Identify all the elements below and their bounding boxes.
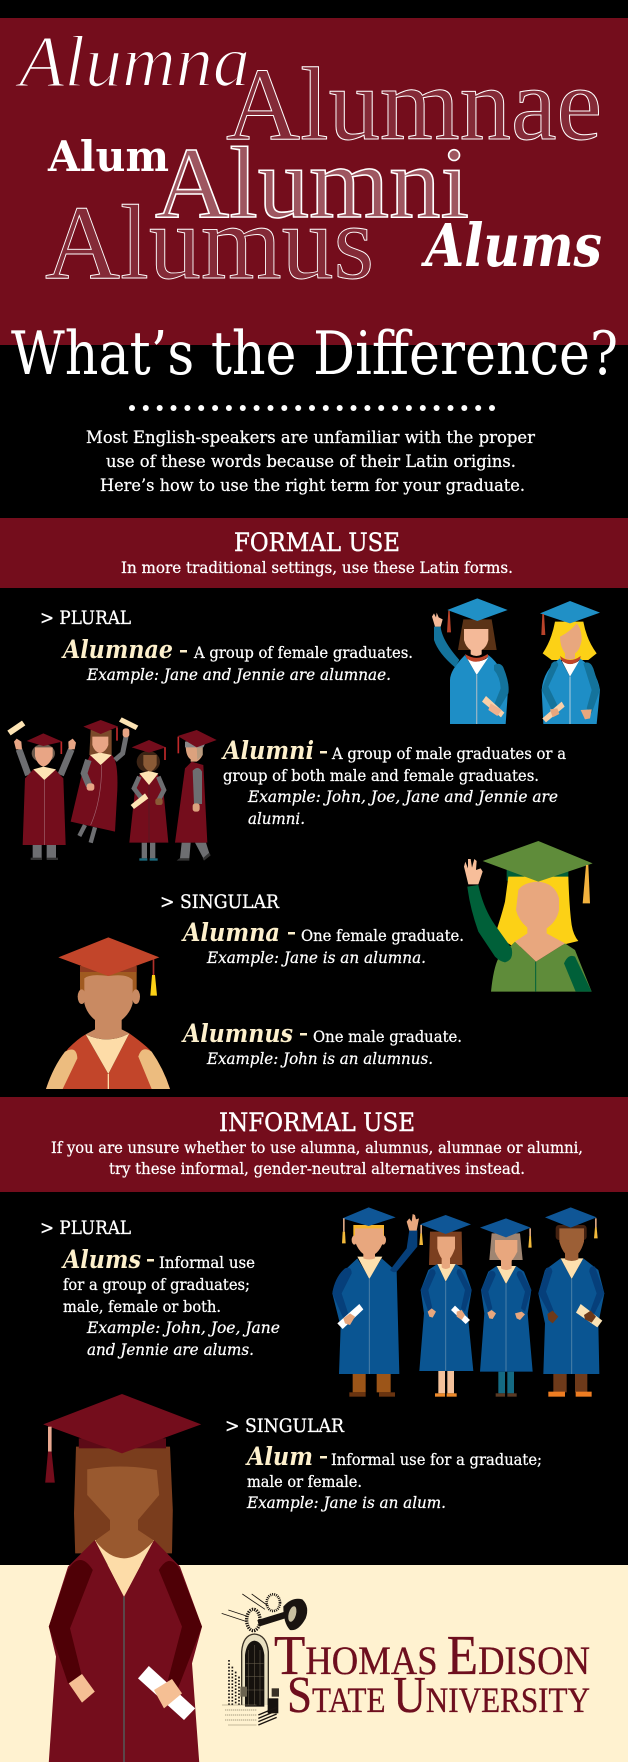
definition: alumni	[221, 736, 566, 828]
figure: jumping graduate	[71, 717, 138, 843]
illustration: two women graduates in blue	[432, 598, 600, 724]
definition: alums: Example: John, Joe, Jane	[86, 1318, 280, 1337]
banner text	[51, 1138, 583, 1178]
figure: blonde woman	[540, 601, 600, 724]
label: plural: > PLURAL	[40, 1217, 131, 1239]
intro text block: Most English-speakers are unfamiliar with the proper	[86, 428, 536, 448]
banner subtitle: In more traditional settings, use these Latin forms.	[121, 558, 513, 577]
panel: formal use banner	[0, 518, 628, 588]
figure: graduate with arms raised	[7, 721, 76, 860]
definition: alumna: One female graduate.	[301, 926, 464, 945]
definition: alumnae: Example: Jane and Jennie are alumnae.	[86, 665, 391, 684]
definition: alumnae	[61, 635, 413, 684]
illustration: large maroon graduate	[43, 1394, 202, 1762]
definition: alumni: A group of male graduates or a	[331, 744, 566, 763]
definition: alums: for a group of graduates;	[63, 1275, 250, 1294]
heading: informal use: INFORMAL USE	[219, 1108, 415, 1137]
definition: alumni: Example: John, Joe, Jane and Jennie are	[247, 787, 558, 806]
definition: alumnae: Alumnae	[61, 635, 173, 664]
definition: alums: Informal use	[159, 1253, 255, 1272]
definition: alumnae: A group of female graduates.	[193, 643, 413, 662]
figure: dark-haired graduate with diploma	[129, 740, 168, 861]
definition: alum: Example: Jane is an alum.	[246, 1493, 446, 1512]
word: Alumnae: Alumnae	[226, 47, 602, 162]
figure: brown-haired woman	[419, 1215, 473, 1397]
illustration: man in red gown	[46, 937, 170, 1089]
definition: alum: Informal use for a graduate;	[331, 1450, 542, 1469]
illustration: four celebrating graduates in maroon	[7, 717, 217, 861]
panel: hero word cloud	[0, 18, 628, 345]
definition: alumna: Example: Jane is an alumna.	[206, 948, 426, 967]
definition: alumna	[181, 918, 464, 967]
definition: alum: male or female.	[247, 1472, 362, 1491]
figure: walking graduate in profile	[175, 730, 217, 861]
figure: waving blond man	[332, 1207, 419, 1397]
figure: dark-skinned man with diploma	[538, 1207, 604, 1397]
figure: grey-haired woman	[480, 1218, 533, 1397]
definition: alumna: Alumna	[181, 918, 280, 947]
word: Alumni: Alumni	[155, 127, 469, 240]
definition: alums: male, female or both.	[63, 1297, 221, 1316]
definition: alums: Alums	[61, 1245, 141, 1274]
definition: alums	[61, 1245, 280, 1359]
dotted divider	[129, 405, 495, 411]
illustration: four graduates in blue	[332, 1207, 604, 1397]
logo engraving: archway and lamp	[222, 1594, 307, 1725]
label: plural: > PLURAL	[40, 607, 131, 629]
definition: alumni: Alumni	[221, 736, 314, 765]
label: singular: > SINGULAR	[225, 1415, 345, 1437]
intro text block: use of these words because of their Latin origins.	[106, 452, 516, 472]
definition: alumnus: Example: John is an alumnus.	[206, 1049, 433, 1068]
definition: alumnus: One male graduate.	[313, 1027, 462, 1046]
definition: alumni: group of both male and female graduates.	[223, 766, 539, 785]
banner text: try these informal, gender-neutral alternatives instead.	[109, 1159, 525, 1178]
logo wordmark: line 1: THOMAS EDISON	[274, 1625, 590, 1687]
definition: alums: and Jennie are alums.	[87, 1340, 254, 1359]
panel: informal use banner	[0, 1097, 628, 1192]
word: Alumna: Alumna	[15, 21, 250, 102]
intro text block	[86, 428, 536, 496]
definition: alumnus: Alumnus	[181, 1019, 293, 1048]
definition: alum: Alum	[245, 1442, 313, 1471]
word: Alum: Alum	[47, 132, 169, 181]
logo: Thomas Edison State University	[222, 1594, 590, 1725]
definition: alumnus	[181, 1019, 462, 1068]
heading: formal use: FORMAL USE	[234, 528, 400, 557]
panel: cream footer	[0, 1565, 628, 1762]
definition: alumni: alumni.	[248, 809, 305, 828]
intro text block: Here’s how to use the right term for your graduate.	[100, 476, 525, 496]
illustration: waving blonde woman in green	[464, 841, 593, 992]
banner text: If you are unsure whether to use alumna, alumnus, alumnae or alumni,	[51, 1138, 583, 1157]
figure: brown-haired woman waving	[432, 598, 509, 724]
label: singular: > SINGULAR	[160, 891, 280, 913]
logo wordmark: line 2: STATE UNIVERSITY	[287, 1667, 590, 1724]
word: Alums: Alums	[421, 211, 602, 280]
word: Alumus: Alumus	[45, 184, 374, 301]
definition: alum	[245, 1442, 542, 1512]
